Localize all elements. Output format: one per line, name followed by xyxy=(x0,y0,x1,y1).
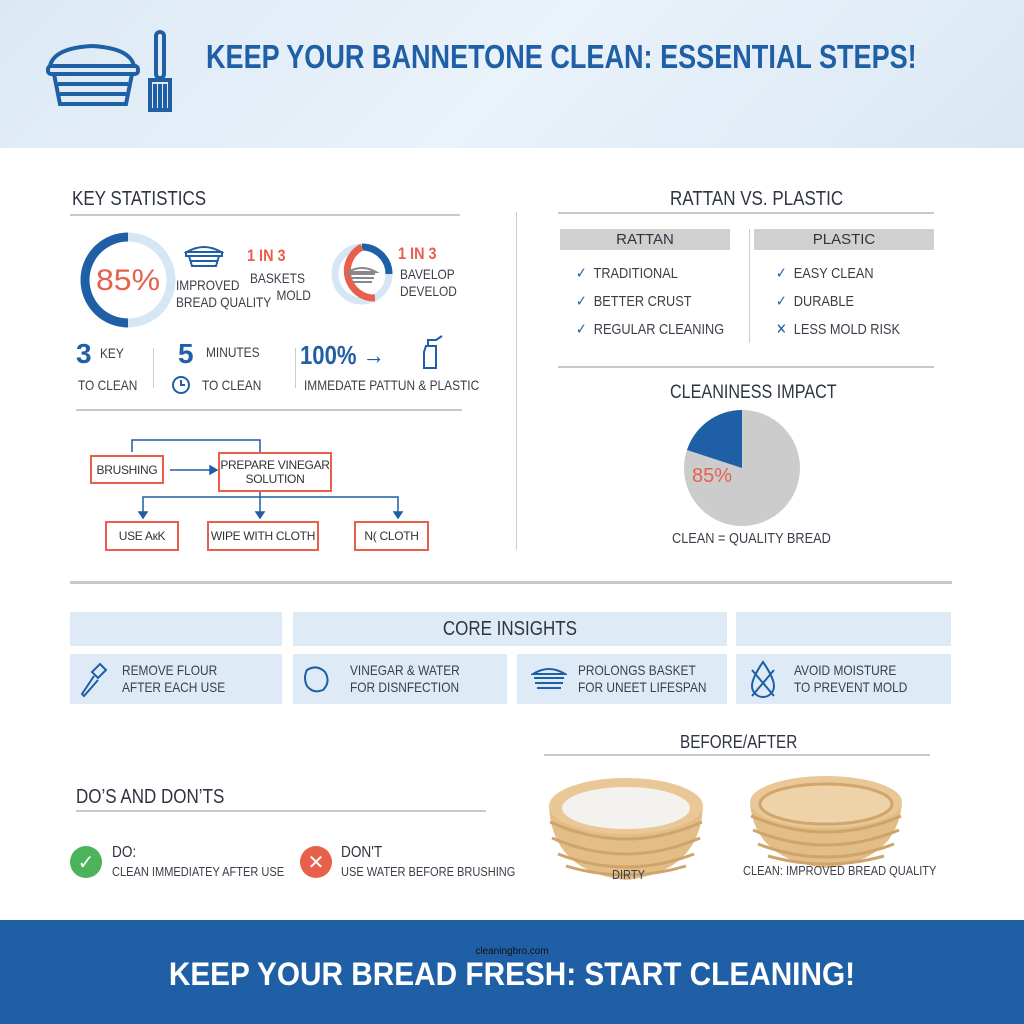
panel: rattan vs plastic: ✓ TRADITIONAL xyxy=(576,265,678,282)
icon: clock xyxy=(172,376,190,394)
footer band xyxy=(0,920,1024,1024)
pie chart: 85% xyxy=(692,465,732,487)
donut 85% xyxy=(80,232,176,328)
panel: key statistics: WIPE WITH CLOTH xyxy=(211,529,315,543)
panel: cleanliness impact: CLEAN = QUALITY BREAD xyxy=(672,530,831,547)
footer band: cleaningbro.com xyxy=(475,946,549,957)
panel: key statistics: N( CLOTH xyxy=(364,529,419,543)
panel: key statistics: MINUTES xyxy=(206,344,260,360)
panel: key statistics: 1 IN 3 xyxy=(247,246,286,265)
panel: key statistics: IMMEDATE PATTUN & PLASTIC xyxy=(304,377,479,393)
panel: rattan vs plastic xyxy=(558,188,934,343)
insight: avoid moisture xyxy=(736,654,951,704)
panel: do's and don'ts xyxy=(70,786,515,879)
panel: key statistics: 1 IN 3 xyxy=(398,244,437,263)
panel: do's and don'ts: CLEAN IMMEDIATEY AFTER USE xyxy=(112,864,284,879)
panel: key statistics: TO CLEAN xyxy=(202,377,261,393)
panel: do's and don'ts: USE WATER BEFORE BRUSHING xyxy=(341,864,515,879)
insight: prolongs: FOR UNEET LIFESPAN xyxy=(578,679,707,695)
panel: rattan vs plastic: RATTAN VS. PLASTIC xyxy=(670,188,843,210)
donut 85%: 85% xyxy=(96,264,160,297)
insight: remove flour xyxy=(70,654,282,704)
insight: remove flour: REMOVE FLOUR xyxy=(122,662,217,678)
panel: cleanliness impact xyxy=(558,366,934,547)
insight: vinegar: VINEGAR & WATER xyxy=(350,662,460,678)
panel: before/after: CLEAN: IMPROVED BREAD QUALITY xyxy=(743,863,936,878)
panel: key statistics: 100% → xyxy=(300,340,385,370)
panel: cleanliness impact: CLEANINESS IMPACT xyxy=(670,382,837,403)
panel: do's and don'ts: DO: xyxy=(112,844,136,861)
panel: key statistics: 5 xyxy=(178,338,194,369)
panel: before/after: DIRTY xyxy=(612,867,645,882)
panel: rattan vs plastic: ✕ LESS MOLD RISK xyxy=(776,321,900,338)
panel: key statistics: BAVELOP xyxy=(400,266,455,282)
panel: before/after xyxy=(544,732,936,882)
panel: rattan vs plastic: ✓ BETTER CRUST xyxy=(576,293,692,310)
panel: rattan vs plastic: PLASTIC xyxy=(813,231,875,248)
insight: avoid moisture: TO PREVENT MOLD xyxy=(794,679,907,695)
panel: key statistics: PREPARE VINEGAR xyxy=(220,458,330,472)
stats row: 3 xyxy=(76,338,92,369)
insight: avoid moisture: AVOID MOISTURE xyxy=(794,662,896,678)
insight: vinegar xyxy=(293,654,507,704)
heading xyxy=(293,612,727,646)
panel: key statistics: MOLD xyxy=(276,287,311,303)
insight: prolongs xyxy=(517,654,727,704)
icon: cross xyxy=(300,846,332,878)
insight: prolongs: PROLONGS BASKET xyxy=(578,662,696,678)
title: KEEP YOUR BANNETONE CLEAN: ESSENTIAL STEPS! xyxy=(206,38,917,75)
panel: key statistics: DEVELOD xyxy=(400,283,457,299)
icon: check xyxy=(70,846,102,878)
panel: before/after: BEFORE/AFTER xyxy=(680,732,797,752)
donut 1 in 3 xyxy=(332,244,392,304)
panel: key statistics: BRUSHING xyxy=(97,462,157,476)
panel: core insights xyxy=(70,612,951,704)
panel: key statistics: IMPROVED xyxy=(176,277,239,293)
icon: cross: ✕ xyxy=(308,850,324,874)
panel: key statistics: SOLUTION xyxy=(246,472,304,486)
panel: do's and don'ts: DO’S AND DON’TS xyxy=(76,786,224,808)
icon: check: ✓ xyxy=(78,850,94,874)
stat: improved quality xyxy=(184,246,224,267)
footer slogan: KEEP YOUR BREAD FRESH: START CLEANING! xyxy=(169,956,855,992)
panel: key statistics: TO CLEAN xyxy=(78,377,137,393)
panel: do's and don'ts: DON'T xyxy=(341,844,382,861)
flowchart xyxy=(131,439,404,520)
panel: key statistics: BASKETS xyxy=(250,270,305,286)
heading: CORE INSIGHTS xyxy=(443,618,577,640)
image: dirty basket xyxy=(549,778,703,880)
panel: key statistics: BREAD QUALITY xyxy=(176,294,271,310)
panel: key statistics: USE AкK xyxy=(119,529,165,543)
panel: rattan vs plastic: RATTAN xyxy=(616,231,674,248)
header band xyxy=(0,0,1024,148)
insight: remove flour: AFTER EACH USE xyxy=(122,679,225,695)
panel: rattan vs plastic: ✓ DURABLE xyxy=(776,293,854,310)
panel: rattan vs plastic: ✓ EASY CLEAN xyxy=(776,265,874,282)
icon: spray bottle xyxy=(423,335,442,369)
image: clean basket xyxy=(750,776,902,868)
pie chart xyxy=(684,410,800,526)
panel: rattan vs plastic: ✓ REGULAR CLEANING xyxy=(576,321,724,338)
panel: key statistics xyxy=(70,188,479,551)
panel: key statistics: KEY xyxy=(100,345,124,361)
insight: vinegar: FOR DISNFECTION xyxy=(350,679,459,695)
heading: KEY STATISTICS xyxy=(72,188,206,210)
icon: basket and brush xyxy=(46,30,172,112)
